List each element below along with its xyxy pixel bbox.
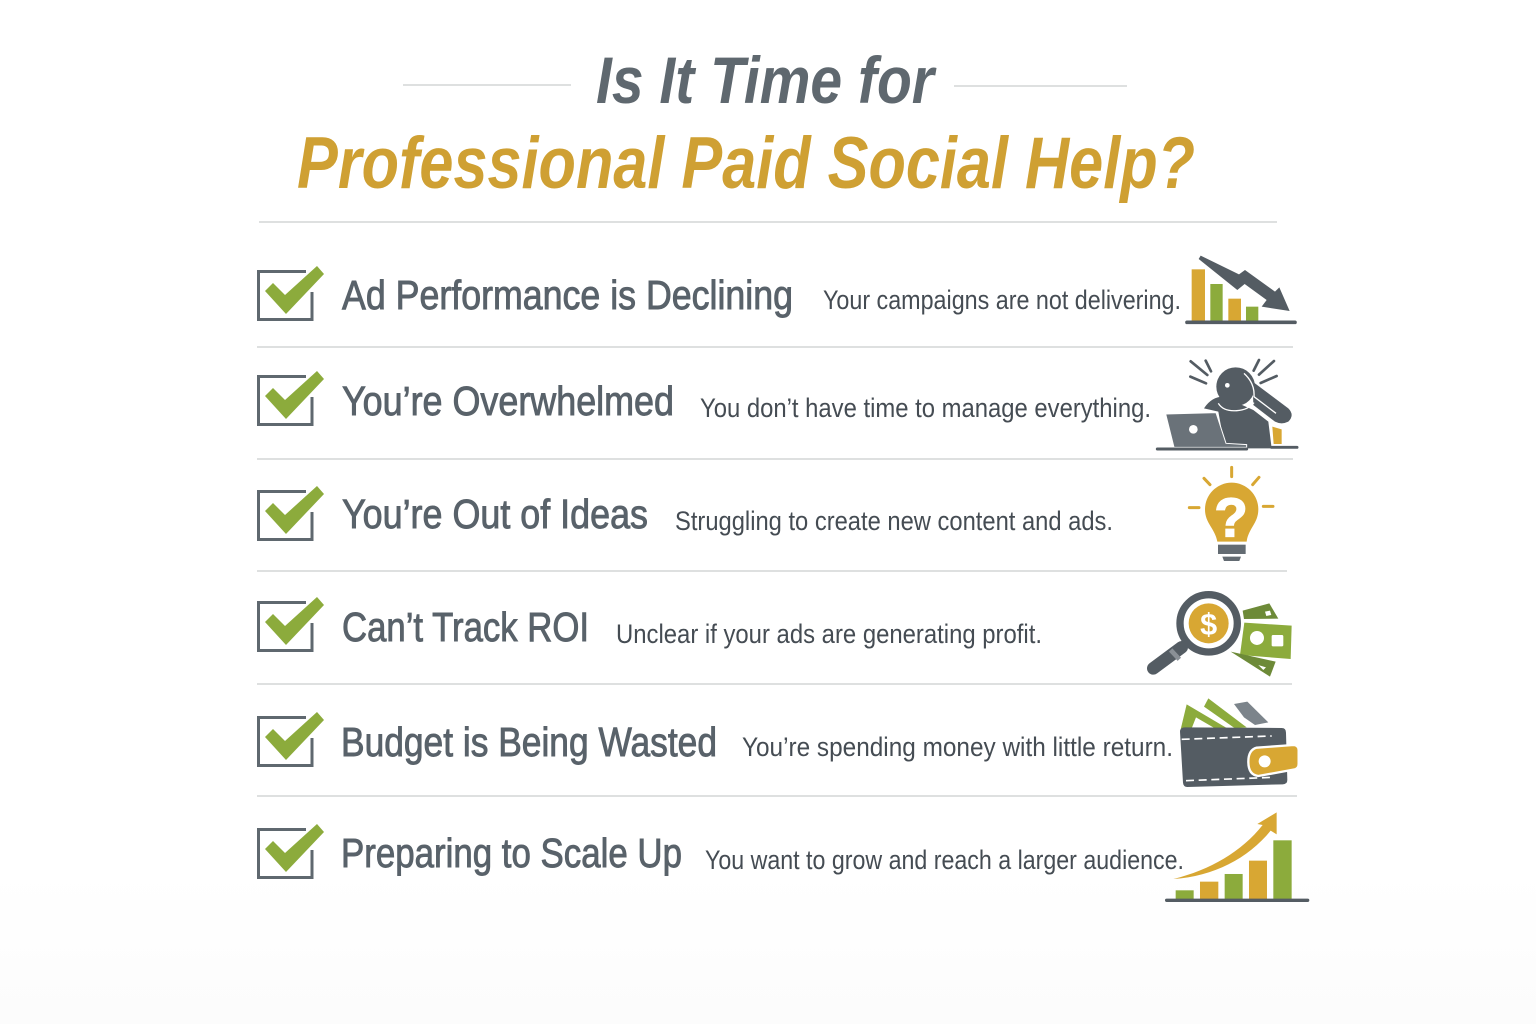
row 1: ad performance bbox=[258, 256, 1295, 322]
description 4: Unclear if your ads are generating profit. bbox=[616, 619, 1042, 649]
description 5: You’re spending money with little return. bbox=[742, 732, 1173, 762]
checkbox 2 bbox=[258, 371, 324, 424]
row 6: scaling up bbox=[258, 812, 1308, 900]
title line 1: Is It Time for bbox=[596, 43, 937, 117]
icon: light bulb with question mark: ? bbox=[1214, 487, 1248, 549]
row 4: cannot track ROI bbox=[258, 595, 1292, 677]
icon: magnifier with dollar and cash: $ bbox=[1200, 607, 1217, 641]
checkbox 1 bbox=[258, 266, 324, 320]
heading 3: You’re Out of Ideas bbox=[342, 491, 648, 537]
heading 6: Preparing to Scale Up bbox=[341, 830, 682, 876]
title line 2: Professional Paid Social Help? bbox=[297, 123, 1195, 204]
checkbox 3 bbox=[258, 486, 324, 540]
description 6: You want to grow and reach a larger audience. bbox=[705, 845, 1184, 875]
icon: magnifier with dollar and cash bbox=[1153, 595, 1292, 677]
description 3: Struggling to create new content and ads. bbox=[675, 506, 1113, 536]
icon: wallet with cash bbox=[1180, 698, 1299, 787]
description 1: Your campaigns are not delivering. bbox=[823, 285, 1181, 315]
checkbox 5 bbox=[258, 712, 324, 766]
icon: light bulb with question mark bbox=[1189, 467, 1273, 561]
heading 2: You’re Overwhelmed bbox=[342, 378, 674, 424]
row 3: out of ideas bbox=[258, 467, 1273, 561]
row 5: budget wasted bbox=[258, 698, 1299, 787]
heading 1: Ad Performance is Declining bbox=[342, 272, 793, 318]
checkbox 4 bbox=[258, 597, 324, 650]
heading 5: Budget is Being Wasted bbox=[341, 719, 717, 765]
icon: overwhelmed person at laptop bbox=[1157, 360, 1297, 449]
icon: declining bar chart bbox=[1187, 256, 1295, 322]
checkbox 6 bbox=[258, 824, 324, 878]
heading 4: Can’t Track ROI bbox=[342, 604, 589, 650]
icon: growth bar chart bbox=[1167, 812, 1308, 900]
row 2: overwhelmed bbox=[258, 360, 1297, 449]
description 2: You don’t have time to manage everything. bbox=[700, 393, 1151, 423]
